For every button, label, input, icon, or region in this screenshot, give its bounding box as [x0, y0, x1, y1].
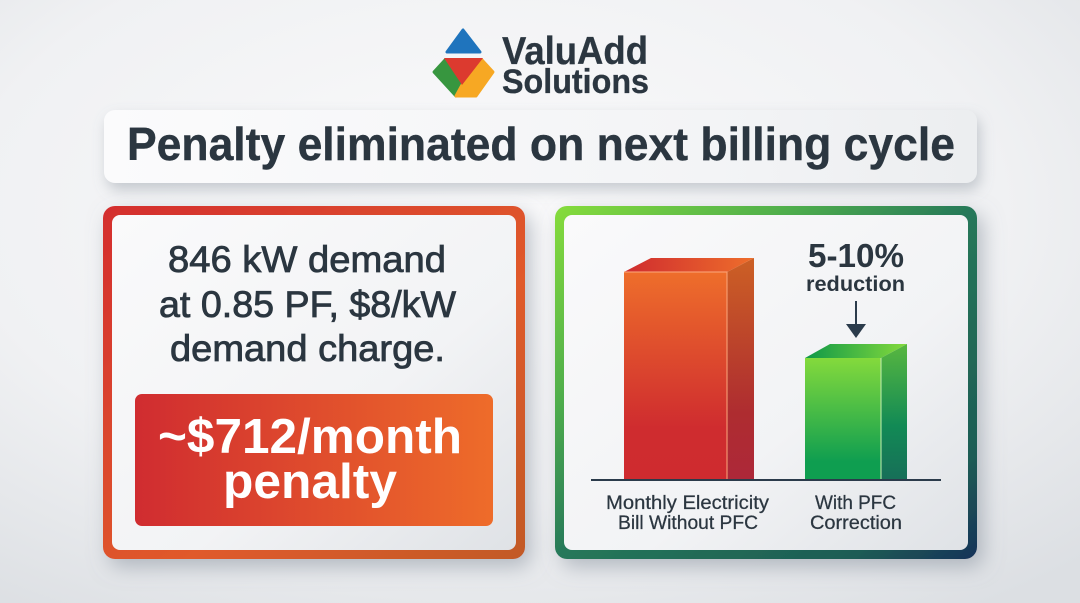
- penalty callout: penalty: [223, 455, 397, 509]
- reduction callout: 5-10%: [808, 237, 904, 274]
- bar label: with PFC: Correction: [810, 513, 902, 534]
- bar label: without PFC: [606, 493, 770, 534]
- panel: bill comparison: [555, 206, 977, 559]
- bar: without PFC: [624, 258, 754, 480]
- axis line: [591, 479, 941, 481]
- bar label: without PFC: Bill Without PFC: [618, 513, 758, 534]
- logo wordmark: Solutions: [502, 63, 649, 101]
- logo icon: [434, 30, 493, 96]
- logo wordmark: ValuAdd: [502, 30, 648, 73]
- bar label: with PFC: [810, 493, 902, 534]
- reduction callout: [806, 237, 905, 296]
- bar label: without PFC: Monthly Electricity: [606, 493, 770, 514]
- penalty callout: ~$712/month: [158, 410, 462, 464]
- bar chart: [591, 258, 941, 534]
- demand description: [159, 239, 456, 369]
- bar label: with PFC: With PFC: [815, 493, 896, 514]
- arrow: down to reduced bar: [846, 301, 866, 338]
- logo wordmark: [502, 30, 649, 101]
- logo: [434, 30, 649, 101]
- demand description: 846 kW demand: [168, 239, 446, 280]
- reduction callout: reduction: [806, 273, 905, 296]
- title banner: [104, 110, 977, 183]
- bar: with PFC: [805, 344, 907, 480]
- penalty callout: [135, 394, 493, 526]
- demand description: demand charge.: [170, 328, 445, 369]
- title: Penalty eliminated on next billing cycle: [127, 118, 955, 170]
- panel: penalty cost: [103, 206, 525, 559]
- demand description: at 0.85 PF, $8/kW: [159, 284, 456, 325]
